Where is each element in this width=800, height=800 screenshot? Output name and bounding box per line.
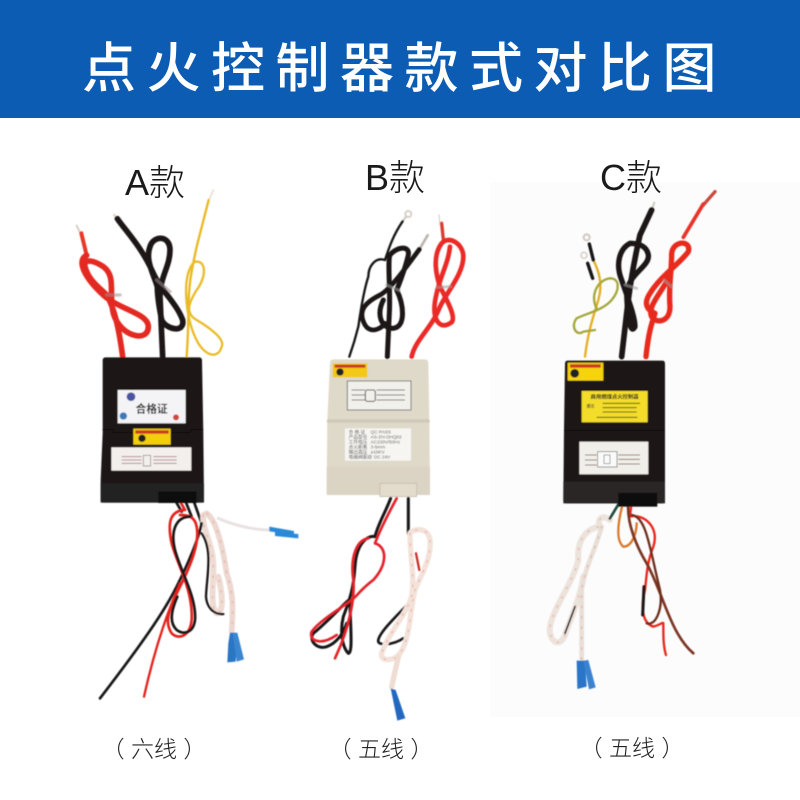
- warning label: [133, 429, 171, 445]
- heading: model A: A款: [125, 162, 185, 203]
- photo backdrop: model C: [490, 182, 800, 717]
- spec label: 3-5mm: [371, 445, 385, 450]
- connector: B: [380, 483, 417, 497]
- title banner: 点火控制器款式对比图: [82, 39, 727, 99]
- warning label: [568, 363, 603, 381]
- body: B beige case: [327, 359, 430, 497]
- product: model C controller: [550, 192, 715, 689]
- caption: model B wire count: （ 五线 ）: [329, 736, 433, 762]
- body: A black case: [101, 357, 204, 503]
- caption: model C wire count: （ 五线 ）: [580, 735, 684, 761]
- spec label: 产品型号: [349, 434, 368, 441]
- wiring diagram label: [579, 442, 648, 474]
- caption: model A wire count: （ 六线 ）: [102, 736, 206, 762]
- wires: B top bundle: [349, 211, 463, 357]
- heading: model B: B款: [365, 157, 425, 198]
- product label: 商用燃煤点火控制器: [591, 393, 639, 401]
- wires: C bottom bundle: [550, 502, 693, 689]
- spec label: ≥15KV: [371, 450, 386, 455]
- spec label: [345, 428, 411, 461]
- spec label: AS-ZH-DHQ02: [371, 435, 402, 440]
- spec label: 合 格 证: [349, 429, 366, 436]
- warning label: [333, 363, 367, 377]
- wiring diagram label: [111, 447, 191, 471]
- connector: A: [158, 492, 197, 503]
- wires: B bottom bundle: [311, 498, 430, 721]
- product label: 樱花: [587, 403, 595, 409]
- wiring diagram label: [347, 381, 411, 410]
- spec label: 电磁阀驱动: [349, 454, 372, 461]
- certificate label: [118, 390, 186, 423]
- product: model B controller: [311, 211, 463, 721]
- certificate label: 合格证: [136, 402, 168, 415]
- body: C black case: [563, 361, 665, 507]
- spec label: 点火距离: [349, 444, 368, 451]
- spec label: DC 24V: [374, 455, 391, 460]
- product label: [582, 391, 648, 422]
- wires: A bottom bundle: [100, 500, 298, 698]
- product: model A controller: [77, 190, 298, 698]
- spec label: AC220V/50Hz: [371, 440, 401, 445]
- heading: model C: C款: [600, 157, 662, 198]
- spec label: 工作电压: [349, 439, 368, 446]
- spec label: 输出高压: [349, 449, 368, 456]
- wires: A top bundle: [77, 190, 222, 357]
- wires: C top bundle: [574, 192, 715, 357]
- spec label: QC PASS: [371, 430, 391, 435]
- title banner: [0, 0, 800, 118]
- connector: C: [618, 493, 657, 507]
